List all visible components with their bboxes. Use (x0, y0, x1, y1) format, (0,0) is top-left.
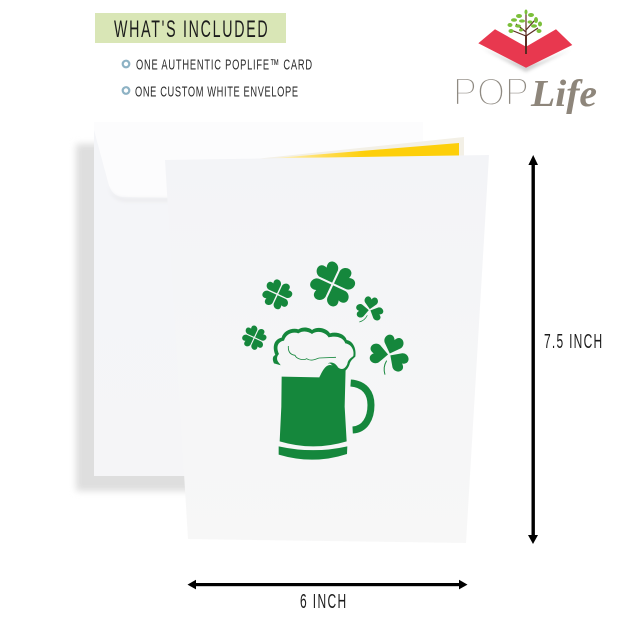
clover: large three-leaf (369, 333, 411, 374)
list: included items: ONE CUSTOM WHITE ENVELOPE (135, 83, 298, 100)
arrow: height dimension (528, 155, 538, 544)
envelope flap (94, 122, 423, 198)
envelope (76, 122, 423, 491)
envelope shadow (76, 144, 196, 491)
foam white (277, 332, 354, 377)
foam outline (273, 328, 356, 372)
logo: PopLife (453, 10, 597, 115)
foam detail (288, 346, 336, 360)
beer mug (273, 328, 371, 460)
label: 7.5 inch: 7.5 INCH (544, 331, 602, 353)
label: 6 inch: 6 INCH (300, 591, 346, 613)
clover: left small four-leaf (239, 323, 269, 353)
clovers and beer mug (239, 256, 411, 460)
heading: what's included: WHAT'S INCLUDED (114, 16, 268, 43)
list: included items: ONE AUTHENTIC POPLIFE™ CARD (136, 56, 312, 73)
list: included items (123, 56, 312, 100)
logo: PopLife: Life (530, 73, 597, 115)
mug handle (351, 383, 371, 430)
clover: right three-leaf (356, 296, 384, 322)
card inner page with yellow edge (255, 137, 464, 159)
logo: PopLife: POP (453, 71, 529, 114)
arrow: width dimension (188, 580, 468, 589)
clover: upper-left four-leaf (259, 276, 296, 313)
greeting card front (165, 155, 489, 543)
clover: large four-leaf (305, 256, 360, 312)
mug body (280, 365, 347, 446)
mug base (279, 446, 347, 460)
